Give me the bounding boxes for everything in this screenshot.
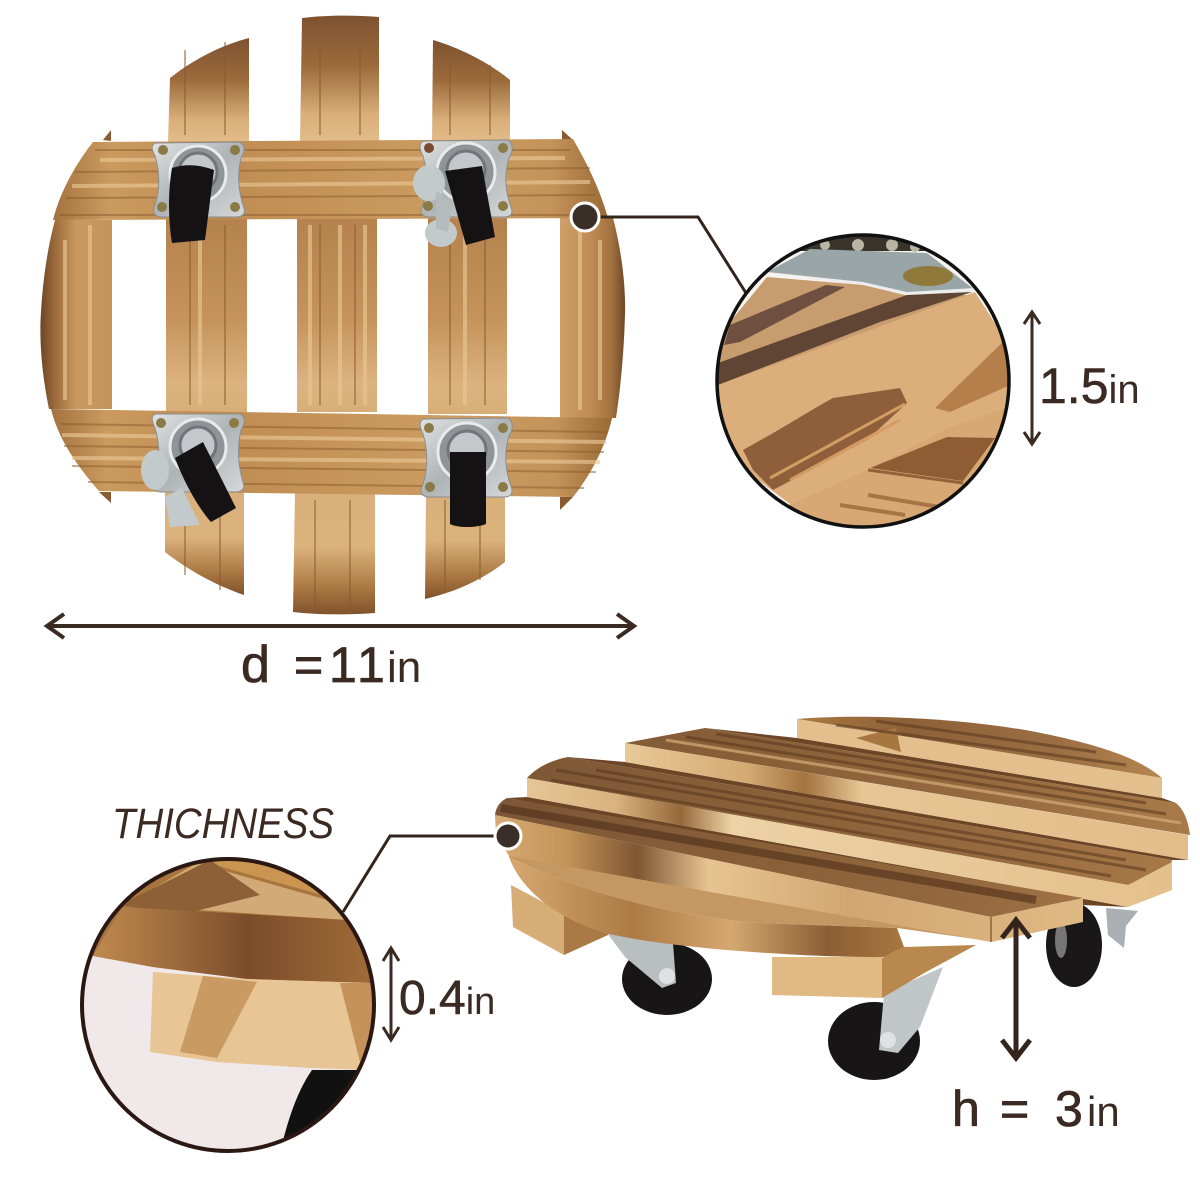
caster: bottom right bbox=[420, 418, 512, 527]
plank: third plank bbox=[527, 757, 1172, 907]
label: board thickness: 0.4in bbox=[399, 972, 495, 1025]
light grain bbox=[62, 158, 606, 462]
caster: bottom left bbox=[141, 414, 244, 527]
caster: top left bbox=[152, 142, 245, 243]
arrow: diameter dimension bbox=[47, 614, 634, 638]
plank: front support block bbox=[772, 945, 976, 998]
plank: bottom cross bar bbox=[51, 409, 612, 497]
panel: top-down underside view bbox=[40, 16, 625, 614]
caster: top right bbox=[413, 140, 512, 247]
label: diameter: in bbox=[387, 643, 421, 692]
heading: thickness: THICHNESS bbox=[112, 800, 334, 848]
panel: board thickness detail circle bbox=[80, 857, 376, 1153]
label: diameter: = bbox=[294, 637, 323, 693]
label: diameter: 1 bbox=[329, 637, 357, 693]
callout: marker and leader line to board detail bbox=[343, 823, 521, 912]
label: rail height: 1.5in bbox=[1039, 358, 1140, 414]
label: height: = bbox=[1000, 1081, 1029, 1137]
corner tabs bbox=[99, 130, 573, 510]
plank: far left slat bbox=[40, 220, 112, 409]
shadow: gaps between planks bbox=[507, 728, 1188, 907]
callout: marker and leader line to rail detail bbox=[571, 203, 746, 293]
label: height: 3 bbox=[1055, 1081, 1083, 1137]
label: height: in bbox=[1087, 1088, 1120, 1135]
label: height: h bbox=[952, 1081, 980, 1137]
arrow: height dimension bbox=[1002, 920, 1030, 1058]
plank: centre slat bbox=[293, 16, 379, 614]
plank: second plank bbox=[625, 728, 1190, 860]
plank: lower disc bbox=[509, 850, 996, 957]
label: diameter: 1 bbox=[357, 637, 385, 693]
panel: rail thickness detail circle bbox=[715, 233, 1012, 535]
plank: right slat bbox=[425, 40, 510, 599]
plank: front plank bbox=[495, 798, 1083, 942]
label: diameter: d bbox=[241, 636, 270, 694]
caster: front left bbox=[607, 933, 712, 1015]
arrow: rail height dimension bbox=[1024, 312, 1040, 444]
plank: far right slat bbox=[560, 218, 625, 418]
plank: left slat bbox=[165, 38, 249, 595]
arrow: board thickness dimension bbox=[383, 948, 399, 1040]
plank: top cross bar bbox=[53, 139, 608, 220]
wood grain bbox=[60, 20, 606, 610]
plank: left support block bbox=[511, 885, 608, 955]
panel: assembled side view bbox=[495, 717, 1190, 1080]
caster: rear right bbox=[1046, 903, 1138, 987]
plank: back plank bbox=[797, 717, 1162, 798]
caster: front centre bbox=[828, 967, 943, 1080]
